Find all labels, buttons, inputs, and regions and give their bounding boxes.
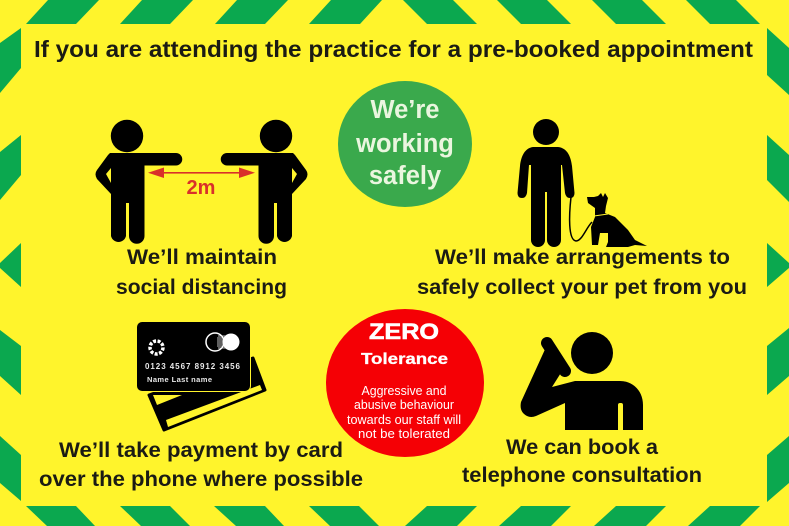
caption: payment by card <box>39 439 363 491</box>
badge: we're working safely: safely <box>369 162 442 190</box>
icon: person with dog on lead <box>518 119 647 247</box>
caption: social distancing: social distancing <box>116 276 287 299</box>
badge: zero tolerance: towards our staff will <box>347 412 461 427</box>
badge: zero tolerance <box>326 309 484 457</box>
badge: we're working safely: We’re <box>371 96 439 124</box>
badge: zero tolerance: Tolerance <box>361 351 448 368</box>
caption: telephone consultation: We can book a <box>506 436 658 459</box>
icon: person on telephone <box>521 332 643 430</box>
caption: collect your pet: safely collect your pet from you <box>417 276 747 299</box>
icon: payment cards: 0123 4567 8912 3456 <box>145 362 241 371</box>
caption: payment by card: We’ll take payment by card <box>59 439 343 462</box>
icon: payment cards <box>136 321 265 430</box>
caption: social distancing: We’ll maintain <box>127 246 277 269</box>
icon: two people 2m apart: 2m <box>187 177 215 199</box>
caption: telephone consultation <box>462 436 702 487</box>
badge: zero tolerance: not be tolerated <box>358 426 450 441</box>
icon: payment cards: Name Last name <box>147 375 212 384</box>
badge: we're working safely <box>338 81 472 207</box>
badge: zero tolerance: ZERO <box>369 319 439 344</box>
caption: payment by card: over the phone where possible <box>39 468 363 491</box>
caption: telephone consultation: telephone consultation <box>462 464 702 487</box>
caption: collect your pet: We’ll make arrangements to <box>435 246 730 269</box>
caption: collect your pet <box>417 246 747 299</box>
badge: zero tolerance: abusive behaviour <box>354 397 455 412</box>
badge: we're working safely: working <box>355 130 454 158</box>
badge: zero tolerance: Aggressive and <box>362 383 446 398</box>
caption: social distancing <box>116 246 287 299</box>
icon: two people 2m apart <box>96 120 308 244</box>
title: If you are attending the practice for a pre-booked appointment <box>34 36 753 62</box>
